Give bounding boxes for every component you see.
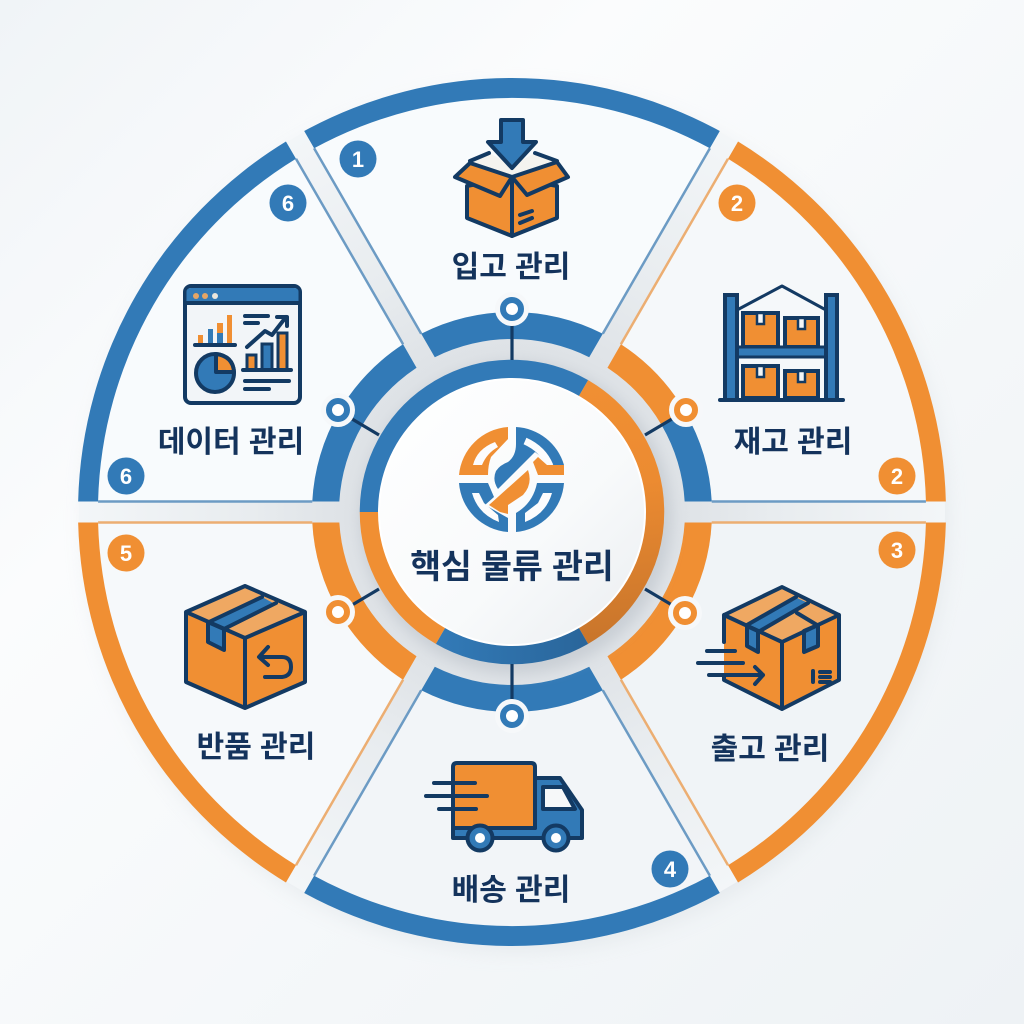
badge 2 top [718, 184, 756, 222]
inner ring shadow [360, 362, 672, 674]
badge 4: 4 [664, 857, 677, 882]
panel: 배송 관리 [304, 667, 720, 946]
badge 1 [340, 140, 376, 178]
panel: 입고 관리 [304, 78, 720, 357]
node: lower left [321, 595, 355, 629]
badge 6 top [270, 184, 306, 222]
badge 2 top: 2 [731, 191, 743, 216]
badge 4 [652, 850, 688, 888]
label: 재고 관리 [734, 426, 852, 459]
panel: 재고 관리 [562, 115, 992, 603]
badge 3: 3 [891, 538, 903, 563]
label: 출고 관리 [711, 733, 829, 766]
connector lines [347, 325, 677, 699]
wheel base with separators [79, 79, 948, 952]
label: 배송 관리 [452, 874, 570, 907]
icon: outbound box [698, 587, 839, 709]
badge 1: 1 [352, 147, 364, 172]
badge 2 bottom [878, 458, 916, 494]
panel: 출고 관리 [562, 421, 992, 909]
icon: warehouse shelf [720, 286, 843, 400]
icon: inbound box [455, 120, 568, 236]
badge 6 bottom [108, 458, 144, 494]
badge 6 bottom: 6 [120, 464, 132, 489]
inner ring [370, 370, 654, 654]
icon: return box [186, 586, 305, 708]
badge 5: 5 [120, 541, 132, 566]
label: 반품 관리 [197, 731, 315, 764]
title: 핵심 물류 관리 [410, 549, 614, 586]
badge 5 [108, 534, 144, 572]
panel: 반품 관리 [32, 421, 462, 909]
node: lower right [668, 596, 702, 630]
icon: delivery truck [426, 763, 582, 850]
node: upper left [321, 393, 355, 427]
label: 데이터 관리 [158, 426, 304, 459]
badge 3 [878, 532, 916, 568]
logo [459, 427, 564, 532]
panel: 데이터 관리 [32, 115, 462, 603]
center disk [379, 379, 645, 645]
node: bottom [495, 699, 529, 733]
icon: data dashboard [185, 286, 300, 403]
label: 입고 관리 [452, 251, 570, 284]
node: top [495, 292, 529, 326]
badge 2 bottom: 2 [891, 464, 903, 489]
node: upper right [669, 393, 703, 427]
badge 6 top: 6 [282, 191, 294, 216]
